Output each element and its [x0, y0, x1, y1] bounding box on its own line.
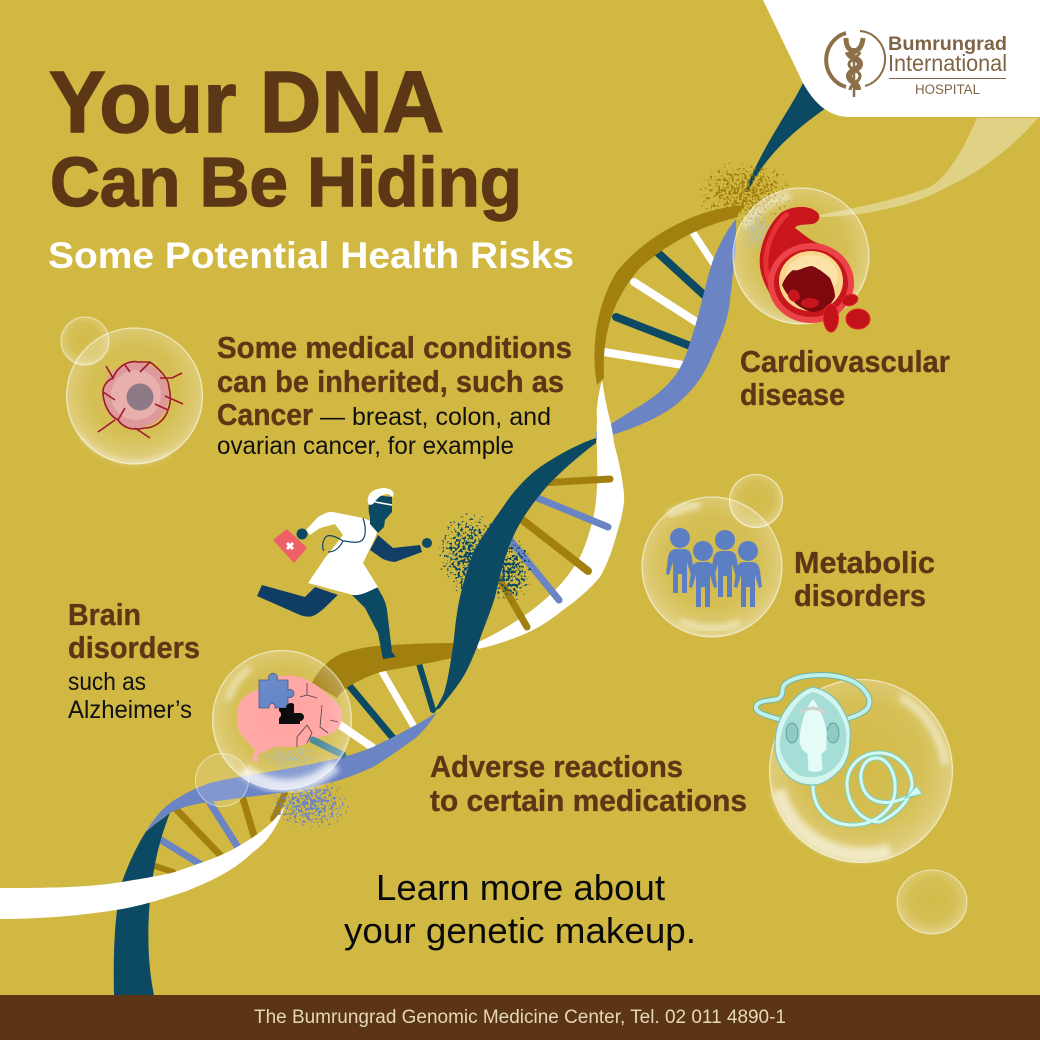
dust: lower blue	[270, 777, 350, 829]
icon: cancer cell with veins	[98, 362, 183, 438]
bubble: cancer, with small bubble	[61, 317, 202, 464]
title	[48, 54, 574, 276]
white corner	[763, 0, 1040, 117]
strand: top navy	[745, 83, 826, 192]
near hand	[296, 528, 308, 540]
dust: middle mixed	[488, 536, 532, 604]
strap	[756, 675, 870, 720]
bubble: brain, with small bubble	[196, 650, 352, 806]
icon: oxygen mask and tube	[756, 675, 922, 825]
nose piece	[799, 698, 827, 772]
logo text: International	[888, 50, 1007, 76]
label: brain: disorders	[68, 631, 200, 665]
front leg	[352, 587, 396, 659]
stethoscope	[323, 518, 365, 552]
mask vents	[786, 723, 839, 743]
rungs: lower section	[143, 657, 433, 872]
call to action: your genetic makeup.	[344, 910, 696, 951]
blood cells	[824, 293, 870, 332]
strand: blue upper	[596, 219, 736, 440]
small bubble	[730, 474, 782, 528]
label: adverse reactions: Adverse reactions	[430, 750, 683, 784]
blue puzzle piece	[259, 673, 294, 708]
mask body	[775, 687, 850, 785]
text: inherited cancer	[217, 331, 572, 460]
tube	[813, 753, 915, 825]
logo panel	[763, 0, 1040, 117]
logo text: HOSPITAL	[915, 82, 980, 97]
label: brain: Alzheimer’s	[68, 696, 192, 724]
speckled dust clusters	[270, 161, 793, 829]
label: adverse reactions: to certain medications	[430, 784, 747, 818]
bubble: small bottom right	[897, 870, 967, 934]
strand: top gold	[595, 205, 745, 385]
title: Can Be Hiding	[50, 143, 522, 221]
logo text	[888, 33, 1007, 97]
strand: bottom white	[0, 806, 285, 919]
icon: brain with puzzle pieces	[237, 673, 343, 763]
label: brain: such as	[68, 668, 146, 696]
text: inherited cancer: ovarian cancer, for example	[217, 432, 514, 460]
text: inherited cancer: — breast, colon, and	[320, 403, 551, 431]
label: cardiovascular	[740, 345, 950, 412]
footer: The Bumrungrad Genomic Medicine Center, Tel. 02 011 4890-1	[254, 1007, 786, 1028]
text: inherited cancer: can be inherited, such as	[217, 365, 564, 399]
title: Your DNA	[49, 54, 444, 151]
hand	[422, 538, 432, 548]
black puzzle piece	[279, 703, 304, 724]
small bubble	[61, 317, 109, 365]
bubble: metabolic, with small bubble	[642, 474, 782, 637]
lab coat	[306, 512, 378, 595]
label: metabolic: Metabolic	[794, 546, 935, 580]
footer	[0, 995, 1040, 1040]
rungs: middle section	[497, 479, 610, 627]
head	[369, 495, 392, 533]
strand: blue lower	[146, 712, 437, 832]
subtitle: Some Potential Health Risks	[48, 235, 574, 276]
dust: top gold	[697, 161, 793, 225]
case cross	[287, 543, 293, 549]
pale ribbon swoosh	[820, 118, 1038, 217]
brain	[237, 676, 342, 763]
label: cardiovascular: disease	[740, 378, 845, 412]
doctor running	[257, 488, 432, 659]
tube connector	[905, 786, 922, 798]
faded rung inside bubble	[313, 740, 343, 755]
label: adverse reactions	[430, 750, 747, 818]
text: inherited cancer: Cancer	[217, 398, 313, 432]
bubble: oxygen mask	[770, 680, 952, 862]
logo emblem	[826, 31, 885, 97]
text: inherited cancer: Some medical conditions	[217, 331, 572, 365]
label: brain	[68, 598, 200, 724]
strand: mid navy	[433, 438, 596, 712]
back arm	[370, 535, 422, 562]
bubble: cardiovascular	[733, 188, 869, 324]
DNA double helix	[0, 83, 826, 995]
small bubble	[196, 754, 248, 806]
icon: artery with plaque and blood cells	[760, 207, 870, 332]
strand: bottom navy	[114, 813, 170, 995]
back leg	[257, 585, 338, 617]
logo text: Bumrungrad	[888, 33, 1007, 55]
label: metabolic	[794, 546, 935, 613]
label: metabolic: disorders	[794, 579, 926, 613]
icon: family group	[666, 528, 762, 607]
rungs: upper section	[604, 228, 713, 365]
call to action: Learn more about	[376, 867, 665, 908]
label: brain: Brain	[68, 598, 141, 632]
call to action	[344, 867, 696, 951]
strand: mid gold	[312, 643, 458, 698]
medical case	[273, 529, 307, 563]
hair and glasses	[368, 488, 394, 505]
dust: middle navy	[438, 513, 502, 597]
label: cardiovascular: Cardiovascular	[740, 345, 950, 379]
strand: white centre	[476, 380, 624, 649]
